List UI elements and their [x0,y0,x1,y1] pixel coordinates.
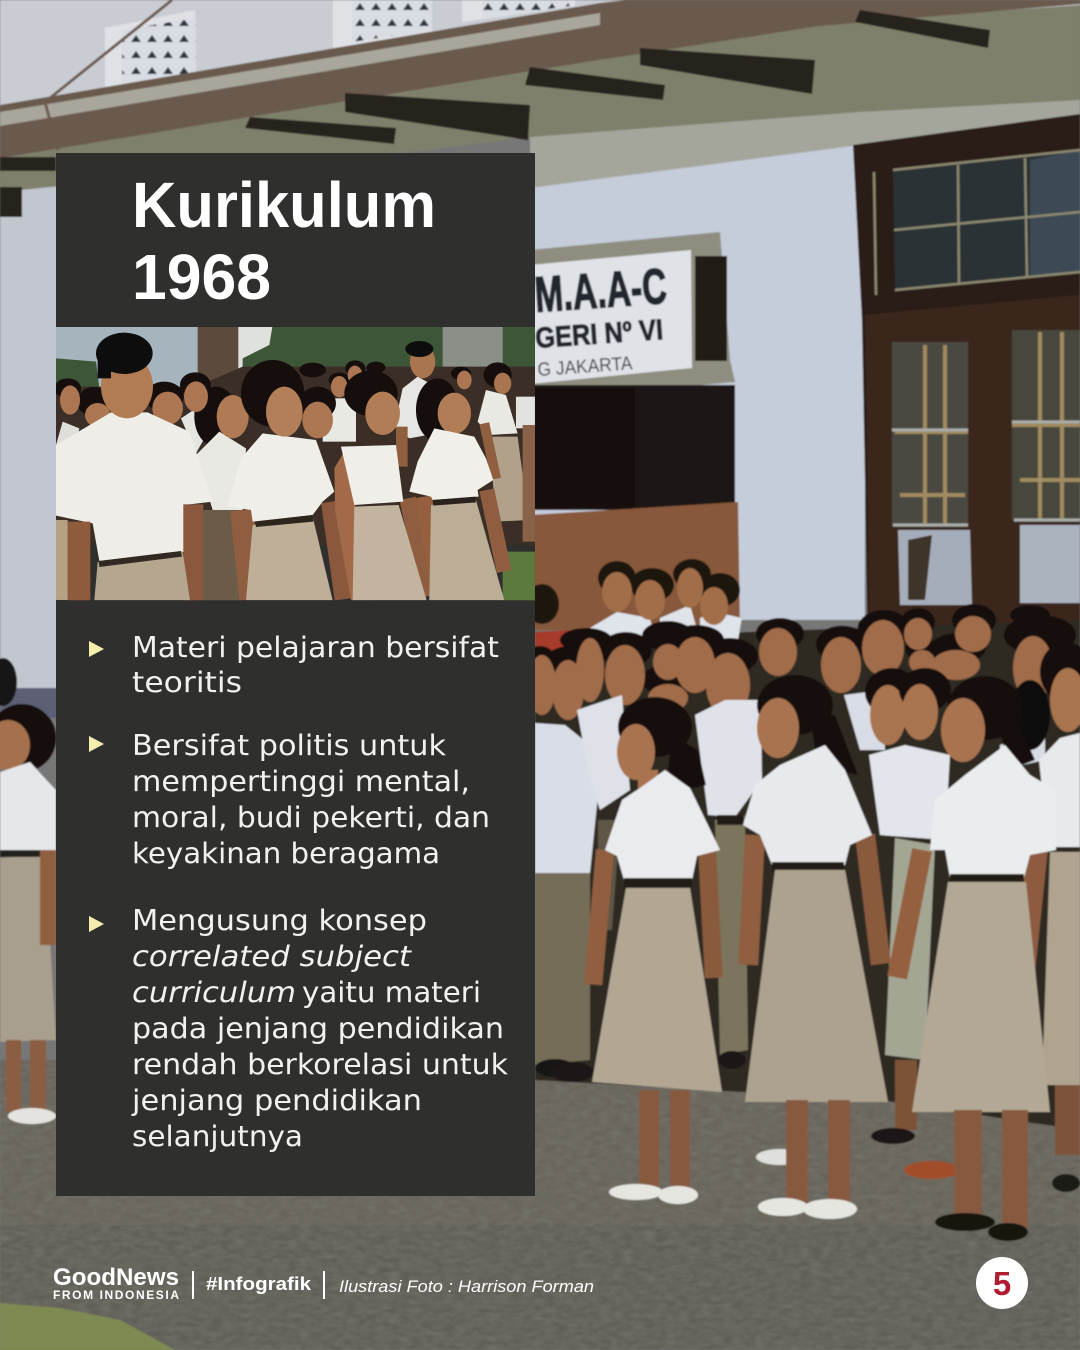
back row students [590,559,742,640]
hashtag: #Infografik [206,1274,312,1294]
right wall [530,130,865,620]
bullet 3: Mengusung konsep [132,904,427,937]
bullet 1: Materi pelajaran bersifat [132,631,499,664]
logo: GoodNews from Indonesia: GoodNews [53,1264,179,1291]
bullet 2 [89,729,490,870]
bullet 2: keyakinan beragama [132,837,440,870]
bullet 1: teoritis [132,666,242,699]
school sign: GERI Nº VI [534,314,664,355]
girl two [228,360,355,601]
inset photo: students lined up [54,325,536,603]
back row boys in shirts [535,690,1045,1082]
awning slats [0,10,990,217]
ground texture [0,1060,1080,1350]
background girl in white [196,432,246,510]
footer [53,1257,1028,1309]
bullet 3: pada jenjang pendidikan [132,1012,504,1045]
tree trunk [198,327,238,381]
diagonal wire [45,0,172,150]
awning beam [0,0,1080,158]
bullet 3: yaitu materi [302,976,481,1009]
student: behind middle [756,668,1050,1179]
girl three [334,371,437,600]
middle row students [524,604,1076,720]
woman at the doorway [525,584,574,660]
bullet 1 [89,631,499,699]
student: front girl one [584,697,723,1204]
ground [0,1060,1080,1350]
sign frame [530,232,735,400]
left ledge [0,688,60,718]
bullet 3: rendah berkorelasi untuk [132,1048,509,1081]
bullet 3: jenjang pendidikan [131,1084,422,1117]
bullet list [89,631,509,1153]
back man [396,376,428,438]
page number badge [976,1257,1028,1309]
grass [0,1303,175,1350]
student: front girl two [738,675,891,1219]
pillar [442,327,503,367]
man in front [56,333,213,602]
awning underside [0,5,1080,192]
background crowd [56,367,536,545]
bullet 3: correlated subject [132,940,413,973]
left lower wall [0,170,60,700]
school sign: G JAKARTA [537,353,633,381]
grass [503,552,536,602]
bullet 2: Bersifat politis untuk [132,729,447,762]
school sign: M.A.A-C [533,258,668,323]
bullet 2: mempertinggi mental, [132,765,470,798]
girl four [409,378,511,600]
bullet 2: moral, budi pekerti, dan [132,801,490,834]
background heads [54,360,471,447]
student: right edge [1039,642,1080,1192]
title: 1968 [132,241,271,313]
trees [56,325,536,388]
vent blocks [105,0,575,92]
school sign [530,250,692,384]
upper wall [0,0,1080,130]
student: left edge [0,704,56,1124]
window and door frame [853,114,1080,640]
photo credit: Ilustrasi Foto : Harrison Forman [339,1278,594,1296]
student: front girl three [887,676,1056,1241]
bullet 3 [89,904,509,1153]
panel: dark information card [54,153,536,1196]
page number badge: 5 [993,1265,1011,1302]
right girl [484,362,512,388]
crowd backdrop [535,620,1080,1130]
bullet 3: selanjutnya [132,1120,303,1153]
title: Kurikulum [132,169,436,241]
title [132,169,436,313]
bullet 3: curriculum [132,976,296,1009]
wood panel [530,502,740,630]
sky [56,327,503,387]
logo: GoodNews from Indonesia: FROM INDONESIA [53,1288,179,1302]
door opening [530,385,735,510]
